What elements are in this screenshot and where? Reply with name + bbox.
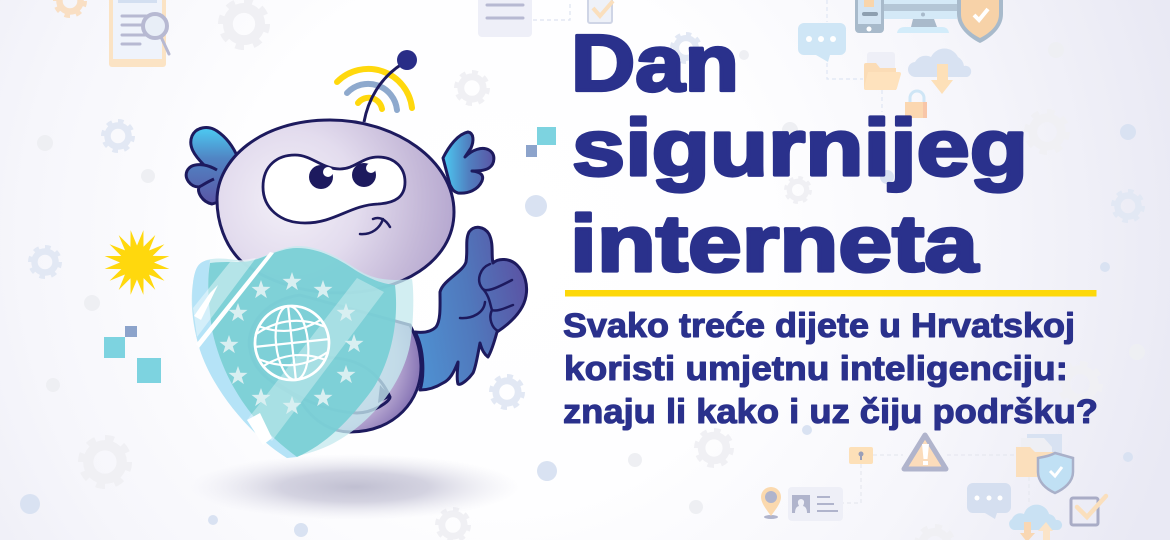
icon: folder with shield [1016,434,1073,493]
icon: yellow sun burst [98,224,176,301]
icon: warning triangle [904,435,946,469]
raised arm with thumbs-up hand [415,227,527,390]
icon: location pin [761,487,781,519]
shield diagonal glass band [247,278,384,441]
icon: phone, monitor and shield [855,0,1003,43]
yellow divider [565,290,1096,296]
antenna [364,50,417,122]
mascot robot [186,50,527,432]
icon: small padlock box and dashed links [843,447,1029,503]
wifi signal arcs [337,69,412,110]
shield glare stripes [193,252,274,445]
subtitle text [563,307,1098,431]
shield outer glass [192,246,413,458]
icon: ID card [788,487,843,521]
mascot ground shadow [190,454,520,520]
subtitle text: Svako treće dijete u Hrvatskoj [563,307,1075,345]
smile [360,218,390,234]
icon: padlock [905,91,927,118]
eyes [309,163,376,189]
transparent shield [192,246,413,458]
circle of twelve stars [219,272,364,414]
left wing [186,128,238,204]
title: Dan sigurnijeg interneta: Dan [571,18,739,108]
title: Dan sigurnijeg interneta [570,18,1028,288]
icon: speech bubble [798,0,863,79]
subtitle text: znaju li kako i uz čiju podršku? [563,393,1098,431]
head [217,120,454,293]
shield teal face [208,248,396,457]
decorative cyan squares left [104,326,161,383]
icon: document card with checkbox [478,0,613,37]
icon: cloud with arrows [1009,505,1062,540]
eye mask [263,155,405,223]
shield light-blue rim [192,260,297,458]
subtitle text: koristi umjetnu inteligenciju: [564,350,1068,388]
icon: speech bubble lower [967,483,1011,519]
decorative cyan squares near title [526,127,556,157]
title: Dan sigurnijeg interneta: interneta [570,199,979,288]
body [249,295,421,432]
icon: clipboard with magnifier [109,0,169,67]
icon: checkbox with tick [1071,496,1106,525]
second arm under the shield [277,358,391,413]
right wing [443,132,494,193]
icon: cloud with download arrow [908,49,971,94]
icon: folder [864,52,901,112]
globe icon [251,302,333,384]
title: Dan sigurnijeg interneta: sigurnijeg [572,103,1028,192]
